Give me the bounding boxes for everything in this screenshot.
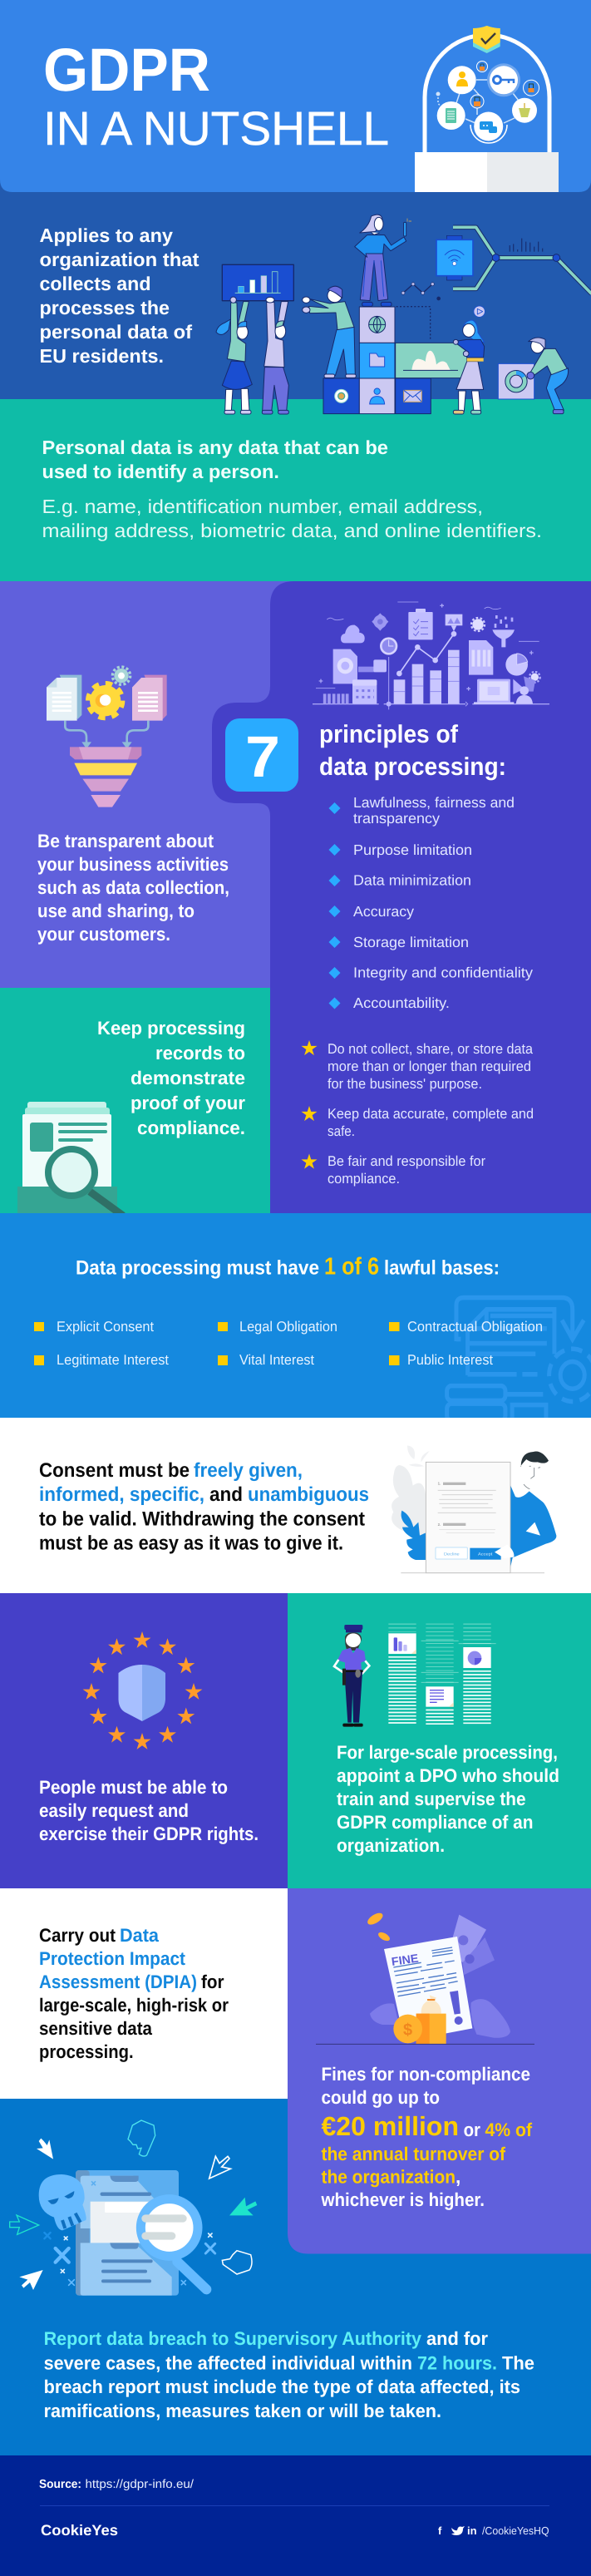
text: fines for non-compliance: could go up to — [321, 2087, 440, 2108]
text: personal data definition — [42, 437, 542, 541]
text: applies to any organization: EU residents. — [40, 345, 164, 367]
text: applies to any organization: collects and — [40, 273, 151, 294]
figure: woman on top with phone — [355, 215, 406, 306]
icon: EU stars around shield — [83, 1631, 202, 1749]
figure: woman holding screen — [216, 297, 252, 414]
text: report data breach: The — [502, 2353, 534, 2373]
panel: intro dark blue — [0, 166, 591, 399]
text: applies to any organization: personal data of — [40, 321, 192, 343]
text: data protection impact assessment: large-scale, high-risk or — [39, 1995, 229, 2016]
text: consent rules: and — [209, 1483, 243, 1506]
panel: personal data teal — [0, 399, 591, 582]
icon: raised chart screen — [222, 264, 293, 301]
text: appoint a DPO: For large-scale processing, — [337, 1742, 558, 1763]
text: keep processing records: records to — [155, 1043, 245, 1063]
heading: lawful bases: 1 of 6 — [324, 1254, 379, 1281]
heading: lawful bases: Data processing must have — [76, 1257, 319, 1279]
figure: man holding screen — [262, 297, 288, 414]
text: people rights: easily request and — [39, 1800, 189, 1821]
social handles: /CookieYesHQ — [482, 2524, 549, 2537]
text: appoint a DPO: appoint a DPO who should — [337, 1765, 559, 1786]
list: starred guidance: more than or longer than required — [328, 1059, 531, 1074]
text: consent rules: must be as easy as it was to give it. — [39, 1532, 343, 1555]
list: starred guidance: for the business' purpose. — [328, 1076, 482, 1092]
text: data protection impact assessment: Data — [120, 1925, 159, 1946]
text: be transparent: Be transparent about — [37, 831, 214, 851]
text: report data breach: and for — [426, 2328, 488, 2349]
heading: principles of data processing — [319, 721, 506, 781]
text: consent rules: Consent must be — [39, 1459, 190, 1482]
icon: data dome on pedestal — [415, 26, 559, 192]
illustration: data analytics line art — [313, 602, 549, 709]
panel: data protection officer — [288, 1593, 591, 1888]
text: keep processing records — [97, 1018, 245, 1138]
panel: header — [0, 0, 591, 192]
heading: lawful bases: lawful bases: — [384, 1257, 500, 1279]
text: fines for non-compliance: Fines for non-compliance — [321, 2064, 530, 2085]
text: fines for non-compliance: the organization — [321, 2167, 456, 2188]
panel: GDPR rights — [0, 1593, 288, 1888]
illustration: man with consent form: 2. — [438, 1522, 441, 1527]
text: fines for non-compliance: whichever is higher. — [321, 2189, 485, 2210]
logo: CookieYes: CookieYes — [41, 2522, 118, 2539]
text: fines for non-compliance: the annual turnover of — [321, 2144, 505, 2164]
text: consent rules: informed, specific, — [39, 1483, 204, 1506]
list: seven principles — [329, 794, 533, 1011]
text: report data breach: 72 hours. — [417, 2353, 497, 2373]
icon: play bubble — [474, 306, 485, 317]
list: six lawful bases: Public Interest — [407, 1352, 493, 1368]
list: seven principles: Data minimization — [353, 871, 471, 888]
text: keep processing records: compliance. — [137, 1118, 245, 1138]
list: seven principles: Integrity and confidentiality — [353, 965, 533, 981]
icon: funnel with documents and gears — [47, 667, 167, 807]
icon: wifi device with connectors — [436, 227, 591, 294]
text: source — [39, 2478, 195, 2491]
title: in a nutshell: IN A NUTSHELL — [43, 102, 389, 155]
list: six lawful bases: Contractual Obligation — [407, 1319, 543, 1335]
text: fines for non-compliance: €20 million — [321, 2111, 459, 2141]
text: report data breach: severe cases, the affected individual within — [44, 2353, 412, 2373]
icon: document and magnifier — [17, 1102, 123, 1216]
heading: principles of data processing: principles of — [319, 721, 459, 748]
list: six lawful bases: Legitimate Interest — [57, 1352, 169, 1368]
illustration: team building data blocks — [216, 215, 591, 414]
text: report data breach: ramifications, measures taken or will be taken. — [44, 2401, 441, 2421]
list: starred guidance: Be fair and responsible for — [328, 1153, 485, 1169]
illustration: fine notice with coins: FINE — [391, 1952, 419, 1968]
list: starred guidance: Keep data accurate, complete and — [328, 1106, 534, 1122]
list: seven principles: Storage limitation — [353, 934, 469, 950]
panel: lawful bases — [0, 1213, 591, 1422]
text: fines for non-compliance — [321, 2064, 532, 2210]
chart: data columns — [388, 1624, 496, 1725]
social handles: f — [438, 2524, 442, 2537]
social handles — [438, 2524, 549, 2537]
list: six lawful bases: Legal Obligation — [239, 1319, 337, 1335]
text: fines for non-compliance: , — [456, 2167, 460, 2188]
icon: skull — [39, 2174, 86, 2230]
list: six lawful bases — [34, 1319, 543, 1368]
heading: lawful bases — [76, 1254, 500, 1281]
illustration: man with consent form: 1. — [438, 1482, 441, 1486]
icon: faint document and gear watermark — [447, 1298, 591, 1422]
text: personal data definition: used to identify a person. — [42, 461, 279, 482]
heading: 7 badge: 7 — [245, 724, 280, 789]
text: data protection impact assessment: processing. — [39, 2041, 134, 2062]
panel: footer — [0, 2455, 591, 2576]
list: seven principles: Lawfulness, fairness and — [353, 794, 515, 811]
text: be transparent: use and sharing, to — [37, 901, 195, 921]
text: keep processing records: Keep processing — [97, 1018, 245, 1039]
text: consent rules: unambiguous — [248, 1483, 369, 1506]
text: be transparent: such as data collection, — [37, 877, 229, 898]
text: be transparent — [37, 831, 229, 945]
panel: transparency left purple — [0, 581, 299, 989]
text: people rights: People must be able to — [39, 1777, 228, 1798]
illustration: DPO officer and data columns — [334, 1624, 496, 1727]
text: appoint a DPO: organization. — [337, 1835, 445, 1856]
text: personal data definition: mailing address, biometric data, and online identifiers. — [42, 520, 542, 541]
list: starred guidance: compliance. — [328, 1171, 400, 1187]
text: appoint a DPO: GDPR compliance of an — [337, 1812, 534, 1833]
text: consent rules: to be valid. Withdrawing the consent — [39, 1508, 365, 1530]
list: six lawful bases: Vital Interest — [239, 1352, 314, 1368]
icon: cross marks — [44, 2233, 215, 2285]
text: data protection impact assessment: sensitive data — [39, 2018, 152, 2039]
illustration: man with consent form: Accept — [478, 1552, 493, 1557]
list: starred guidance: safe. — [328, 1123, 355, 1139]
text: applies to any organization: organization that — [40, 249, 199, 270]
text: people rights — [39, 1777, 259, 1844]
panel: processing records teal — [0, 988, 274, 1216]
text: data protection impact assessment: for — [201, 1971, 224, 1992]
list: starred guidance — [301, 1040, 534, 1187]
text: report data breach: breach report must include the type of data affected, its — [44, 2376, 520, 2397]
text: source: https://gdpr-info.eu/ — [85, 2478, 195, 2491]
text: personal data definition: Personal data is any data that can be — [42, 437, 388, 458]
text: report data breach — [44, 2328, 534, 2421]
illustration: fine notice with coins — [316, 1911, 534, 2044]
illustration: man with consent form: Decline — [444, 1552, 460, 1557]
panel: DPIA — [0, 1888, 288, 2099]
text: people rights: exercise their GDPR rights. — [39, 1823, 259, 1844]
text: data protection impact assessment: Assessment (DPIA) — [39, 1971, 197, 1992]
text: applies to any organization: Applies to any — [40, 225, 173, 246]
figure: stacked data blocks — [323, 307, 467, 414]
social handles: in — [467, 2524, 477, 2537]
text: personal data definition: E.g. name, identification number, email address, — [42, 496, 483, 517]
text: appoint a DPO: train and supervise the — [337, 1789, 525, 1809]
text: be transparent: your customers. — [37, 924, 170, 945]
text: consent rules: freely given, — [194, 1459, 303, 1482]
icon: cursor arrows and hands — [10, 2120, 257, 2290]
text: consent rules — [39, 1459, 369, 1555]
text: be transparent: your business activities — [37, 854, 229, 875]
panel: consent — [0, 1418, 591, 1593]
figure: man pushing block — [303, 286, 356, 378]
text: appoint a DPO — [337, 1742, 559, 1856]
list: seven principles: Accountability. — [353, 994, 450, 1011]
text: report data breach: Report data breach to Supervisory Authority — [44, 2328, 421, 2349]
list: seven principles: Purpose limitation — [353, 841, 472, 858]
list: starred guidance: Do not collect, share, or store data — [328, 1041, 534, 1057]
illustration: fine notice with coins: $ — [403, 2021, 412, 2039]
list: seven principles: Accuracy — [353, 903, 414, 920]
list: six lawful bases: Explicit Consent — [57, 1319, 154, 1335]
text: keep processing records: proof of your — [131, 1093, 245, 1113]
heading: principles of data processing: data processing: — [319, 753, 506, 781]
text: source: Source: — [39, 2478, 81, 2491]
panel: data breach — [0, 2099, 591, 2455]
text: data protection impact assessment — [39, 1925, 229, 2062]
heading: 7 badge — [225, 718, 298, 792]
text: fines for non-compliance: or — [464, 2120, 480, 2140]
title: GDPR: GDPR — [43, 37, 210, 104]
panel: fines — [288, 1888, 591, 2253]
text: keep processing records: demonstrate — [131, 1068, 245, 1088]
figure: man lifting donut box — [498, 338, 569, 414]
panel: seven principles — [212, 581, 591, 1213]
text: data protection impact assessment: Carry out — [39, 1925, 116, 1946]
illustration: breach skull, documents and magnifier — [10, 2120, 257, 2296]
text: applies to any organization: processes the — [40, 297, 170, 318]
text: applies to any organization — [40, 225, 199, 367]
list: seven principles: transparency — [353, 810, 440, 827]
figure: woman holding chart panel — [453, 320, 485, 414]
illustration: man with consent form — [392, 1445, 556, 1573]
text: data protection impact assessment: Protection Impact — [39, 1948, 185, 1969]
figure: officer — [334, 1625, 369, 1727]
text: fines for non-compliance: 4% of — [485, 2120, 532, 2140]
